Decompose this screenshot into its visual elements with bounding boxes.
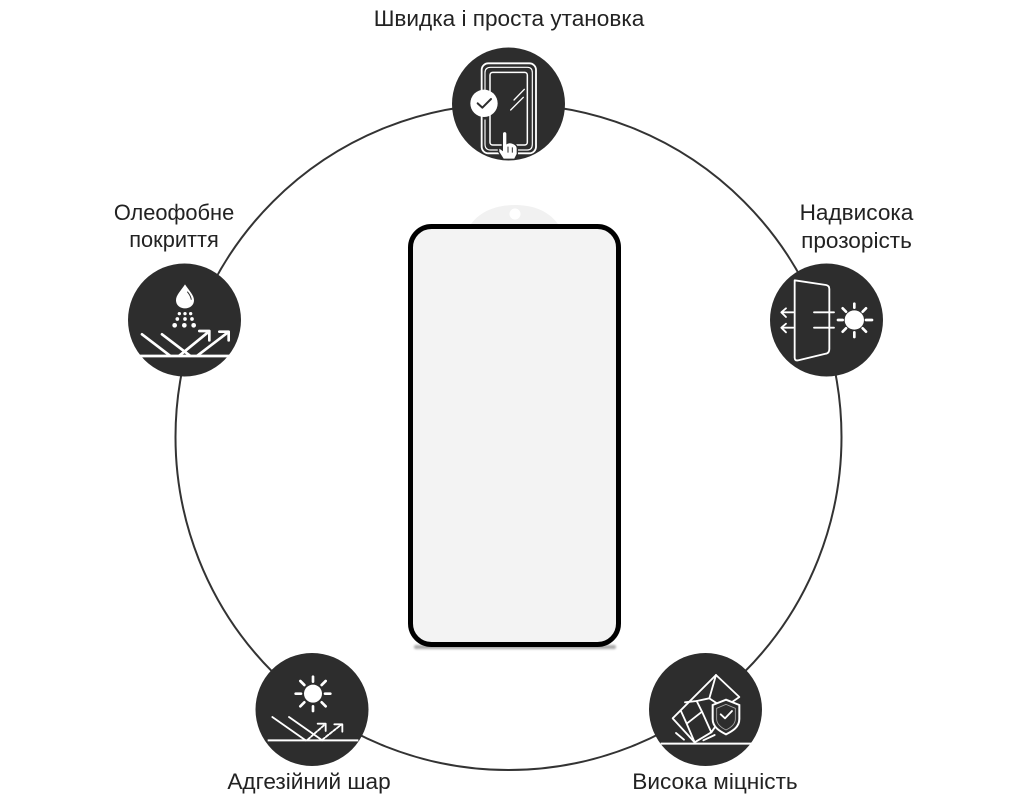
label: high transparency: прозорість <box>801 228 912 253</box>
icon: high transparency <box>770 264 883 376</box>
icon: high strength <box>649 653 762 766</box>
soft shadow under phone <box>414 645 616 649</box>
label: high transparency <box>800 200 914 253</box>
phone with screen protector <box>410 205 618 649</box>
protector tab <box>471 205 558 224</box>
label: oleophobic coating: Олеофобне <box>114 200 234 225</box>
label: oleophobic coating: покриття <box>129 227 219 252</box>
label: high transparency: Надвисока <box>800 200 914 225</box>
icon: quick install <box>452 48 565 160</box>
shield <box>713 700 739 734</box>
label: adhesive layer: Адгезійний шар <box>227 769 391 794</box>
label: quick install: Швидка і проста утановка <box>374 6 645 31</box>
icon: oleophobic coating <box>128 264 241 376</box>
check badge <box>470 90 498 117</box>
phone frame <box>410 226 618 644</box>
main ring connecting the features <box>176 104 842 770</box>
label: oleophobic coating <box>114 200 234 252</box>
icon: adhesive layer <box>256 653 368 766</box>
pointing hand <box>499 131 517 159</box>
label: high strength: Висока міцність <box>632 769 798 794</box>
